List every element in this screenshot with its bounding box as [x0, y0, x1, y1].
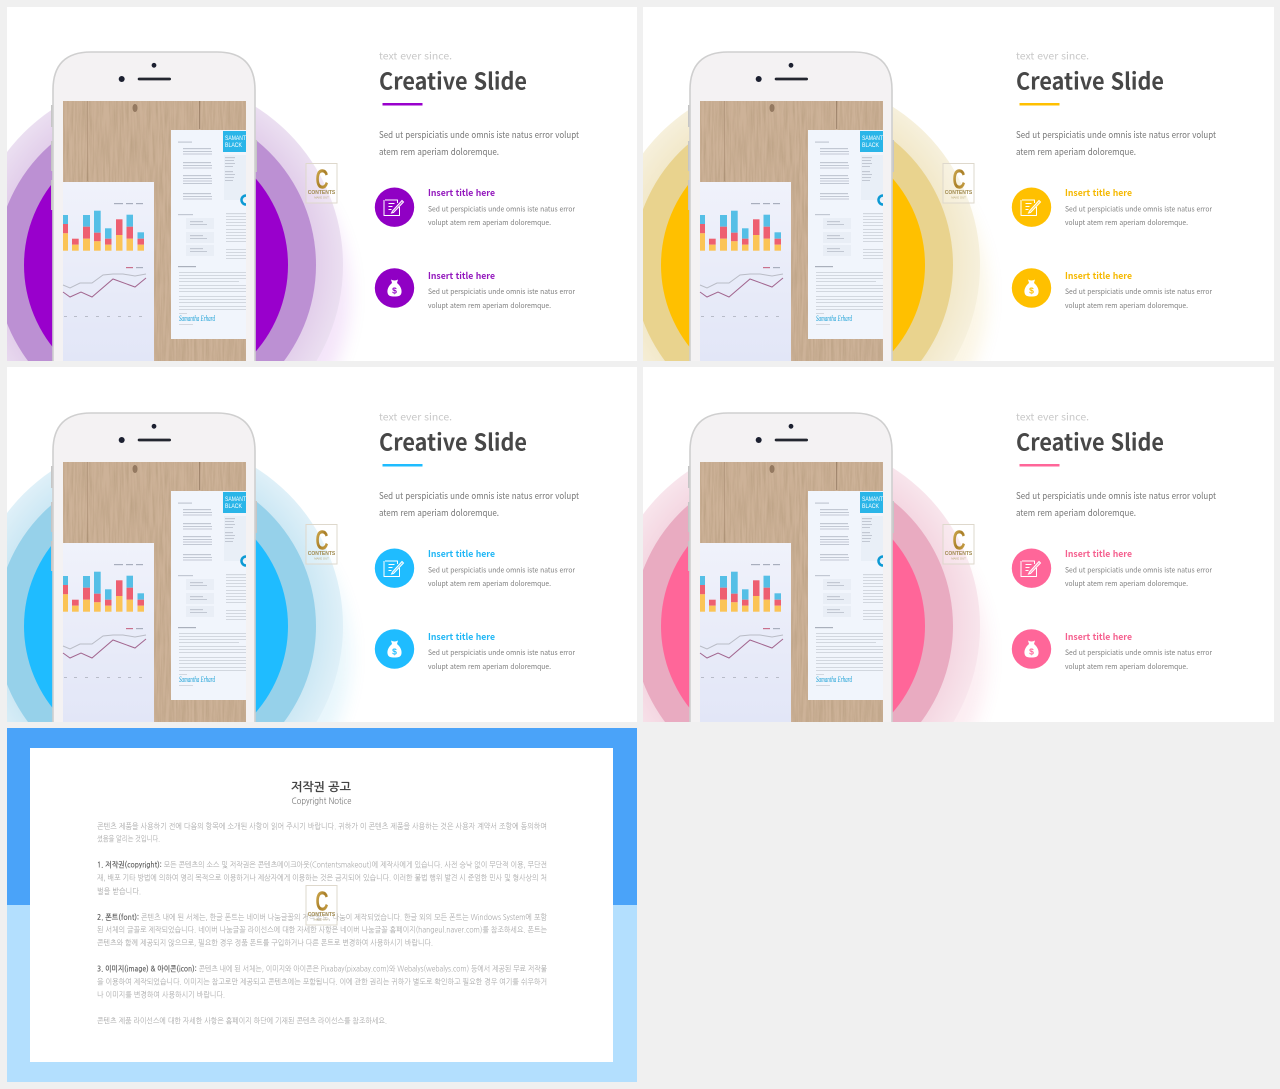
item: money: $ [392, 646, 397, 656]
accent rule [382, 464, 422, 466]
item: money: Sed ut perspiciatis unde omnis iste natus error [1065, 287, 1212, 297]
phone mockup with charts and resume: BLACK [862, 503, 880, 510]
item: money: $ [1029, 646, 1034, 656]
concentric circles: purple [7, 107, 354, 361]
watermark logo: C [952, 164, 966, 194]
watermark logo [306, 524, 337, 564]
watermark logo: C [316, 524, 328, 556]
phone mockup with charts and resume: BLACK [225, 503, 243, 510]
item: money [1012, 629, 1212, 672]
notice heading: 저작권 공고 [291, 780, 352, 793]
kicker: text ever since. [379, 408, 452, 424]
item: money: $ [1029, 286, 1034, 296]
item: notes: Sed ut perspiciatis unde omnis iste natus error [428, 204, 575, 214]
watermark logo: C [316, 886, 328, 916]
notice body text: 을 이용하여 제작되었습니다. 이미지는 참고로만 제공되고 콘텐츠에는 포함됩니다. 이에 관한 권리는 귀하가 별도로 확인하고 필요한 경우 여기를 쉬우하거 [97, 978, 547, 986]
watermark logo [306, 886, 337, 925]
notice body text: 콘텐츠와 함께 제공되지 않으므로, 필요한 경우 정품 폰트를 구입하거나 다른 폰트로 변경하여 사용하시기 바랍니다. [97, 938, 433, 948]
watermark logo [943, 164, 974, 203]
notice body text: 2. 폰트(font): 콘텐츠 내에 된 서체는, 한글 폰트는 네이버 나눔글꼴의 저작물로, 나눔이 제작되었습니다. 한글 외의 모든 폰트는 Windows System에 포함 [97, 912, 547, 922]
watermark logo: CONTENTS [945, 551, 973, 557]
accent rule [382, 103, 422, 106]
item: money: Insert title here [428, 269, 495, 282]
phone mockup with charts and resume [51, 52, 257, 380]
panel: blue slide [7, 367, 637, 722]
notice body text: 셨음을 알리는 것입니다. [97, 834, 160, 844]
intro text: Sed ut perspiciatis unde omnis iste natus error volupt [1016, 128, 1217, 141]
item: notes [1012, 547, 1212, 589]
phone mockup with charts and resume: Samantha Erhard [179, 675, 216, 684]
item: notes: Insert title here [428, 547, 495, 560]
panel: yellow slide [643, 7, 1274, 361]
watermark logo: MAKE OUT [951, 556, 966, 560]
phone mockup with charts and resume [688, 413, 894, 741]
phone mockup with charts and resume: SAMANT [862, 496, 883, 503]
item: money: volupt atem rem aperiam doloremque. [428, 301, 551, 311]
notice body text: 1. 저작권(copyright): 모든 콘텐츠의 소스 및 저작권은 콘텐츠메이크아웃(Contentsmakeout)에 제작사에게 있습니다. 사전 승낙 없이 무단적 이용, 무단전 [97, 860, 547, 870]
phone mockup with charts and resume: BLACK [862, 142, 880, 149]
notice body text: 벌을 받습니다. [97, 887, 141, 896]
item: notes: Insert title here [1065, 186, 1132, 199]
watermark logo: CONTENTS [308, 190, 336, 196]
kicker: text ever since. [1016, 48, 1089, 62]
item: money: $ [392, 286, 397, 296]
watermark logo [306, 164, 337, 203]
title: Creative Slide [1016, 62, 1164, 96]
item: notes: Insert title here [1065, 547, 1132, 560]
item: money: volupt atem rem aperiam doloremque. [1065, 662, 1188, 672]
item: money: Insert title here [1065, 269, 1132, 282]
item: notes [375, 186, 575, 228]
phone mockup with charts and resume: SAMANT [225, 135, 246, 142]
item: money: Insert title here [428, 630, 495, 643]
item: notes: volupt atem rem aperiam doloremque. [428, 218, 551, 228]
intro text: atem rem aperiam doloremque. [1016, 506, 1136, 519]
item: money: volupt atem rem aperiam doloremque. [1065, 301, 1188, 311]
watermark logo: C [316, 164, 328, 194]
concentric circles: blue [7, 468, 354, 722]
item: money [375, 268, 575, 311]
kicker: text ever since. [379, 48, 452, 62]
title: Creative Slide [379, 62, 527, 96]
item: money: Sed ut perspiciatis unde omnis iste natus error [1065, 648, 1212, 658]
watermark logo: C [952, 524, 966, 556]
notice body text [97, 822, 547, 1026]
notice body text: 나 이미지를 변경하여 사용하시기 바랍니다. [97, 990, 225, 1000]
intro text [1016, 489, 1217, 519]
item: money: Sed ut perspiciatis unde omnis iste natus error [428, 648, 575, 658]
intro text: Sed ut perspiciatis unde omnis iste natus error volupt [379, 489, 580, 502]
watermark logo: MAKE OUT [314, 918, 329, 922]
phone mockup with charts and resume: SAMANT [862, 135, 883, 142]
phone mockup with charts and resume [688, 52, 894, 380]
item: money: volupt atem rem aperiam doloremque. [428, 662, 551, 672]
item: notes: Sed ut perspiciatis unde omnis iste natus error [428, 566, 575, 576]
item: money [375, 629, 575, 672]
intro text [379, 128, 580, 158]
intro text: atem rem aperiam doloremque. [379, 506, 499, 519]
watermark logo: MAKE OUT [314, 556, 329, 560]
watermark logo: CONTENTS [308, 912, 336, 918]
item: notes [1012, 186, 1212, 228]
intro text: Sed ut perspiciatis unde omnis iste natus error volupt [379, 128, 580, 141]
watermark logo: MAKE OUT [951, 196, 966, 200]
item: notes: volupt atem rem aperiam doloremque. [1065, 218, 1188, 228]
notice body text: 재, 배포 기타 방법에 의하여 영리 목적으로 이용하거나 제삼자에게 이용하는 것은 금지되어 있습니다. 이러한 불법 행위 발견 시 준엄한 민사 및 형사상의 처 [97, 874, 547, 882]
concentric circles: pink [643, 468, 988, 722]
phone mockup with charts and resume: BLACK [225, 142, 243, 149]
accent rule [1020, 464, 1060, 466]
panel: pink slide [643, 367, 1274, 722]
item: notes [375, 547, 575, 589]
phone mockup with charts and resume: SAMANT [225, 496, 246, 503]
phone mockup with charts and resume [51, 413, 257, 741]
watermark logo: CONTENTS [945, 190, 973, 196]
accent rule [1020, 103, 1060, 106]
watermark logo: MAKE OUT [314, 196, 329, 200]
item: money: Insert title here [1065, 630, 1132, 643]
watermark logo [943, 524, 974, 564]
notice body text: 된 서체의 글꼴로 제작되었습니다. 네이버 나눔글꼴 라이선스에 대한 자세한 사항은 네이버 나눔글꼴 홈페이지(hangeul.naver.com)를 참조하세요. 폰트는 [97, 924, 547, 934]
notice subheading: Copyright Notice [292, 797, 352, 806]
phone mockup with charts and resume: Samantha Erhard [179, 314, 216, 323]
notice body text: 콘텐츠 제품 라이선스에 대한 자세한 사항은 홈페이지 하단에 기재된 콘텐츠 라이선스를 참조하세요. [97, 1016, 387, 1026]
title: Creative Slide [1016, 424, 1164, 458]
intro text: Sed ut perspiciatis unde omnis iste natus error volupt [1016, 489, 1217, 502]
watermark logo: CONTENTS [308, 551, 336, 557]
item: notes: volupt atem rem aperiam doloremque. [1065, 579, 1188, 589]
intro text: atem rem aperiam doloremque. [1016, 145, 1136, 158]
item: notes: volupt atem rem aperiam doloremque. [428, 579, 551, 589]
kicker: text ever since. [1016, 408, 1089, 424]
phone mockup with charts and resume: Samantha Erhard [816, 314, 853, 323]
notice body text: 콘텐츠 제품을 사용하기 전에 다음의 항목에 소개된 사항이 읽어 주시기 바랍니다. 귀하가 이 콘텐츠 제품을 사용하는 것은 사용자 계약서 조항에 동의하여 [97, 822, 547, 831]
intro text: atem rem aperiam doloremque. [379, 145, 499, 158]
item: money [1012, 268, 1212, 311]
item: notes: Insert title here [428, 186, 495, 199]
item: money: Sed ut perspiciatis unde omnis iste natus error [428, 287, 575, 297]
phone mockup with charts and resume: Samantha Erhard [816, 675, 853, 684]
intro text [1016, 128, 1217, 158]
item: notes: Sed ut perspiciatis unde omnis iste natus error [1065, 204, 1212, 214]
item: notes: Sed ut perspiciatis unde omnis iste natus error [1065, 566, 1212, 576]
title: Creative Slide [379, 424, 527, 458]
concentric circles: yellow [643, 107, 990, 361]
intro text [379, 489, 580, 519]
panel: copyright notice [7, 728, 637, 1082]
panel: purple slide [7, 7, 637, 361]
notice body text: 3. 이미지(image) & 아이콘(icon): 콘텐츠 내에 된 서체는, 이미지와 아이콘은 Pixabay(pixabay.com)와 Webalys(webalys.com) 등에서 제공된 무료 저작물 [97, 964, 547, 974]
